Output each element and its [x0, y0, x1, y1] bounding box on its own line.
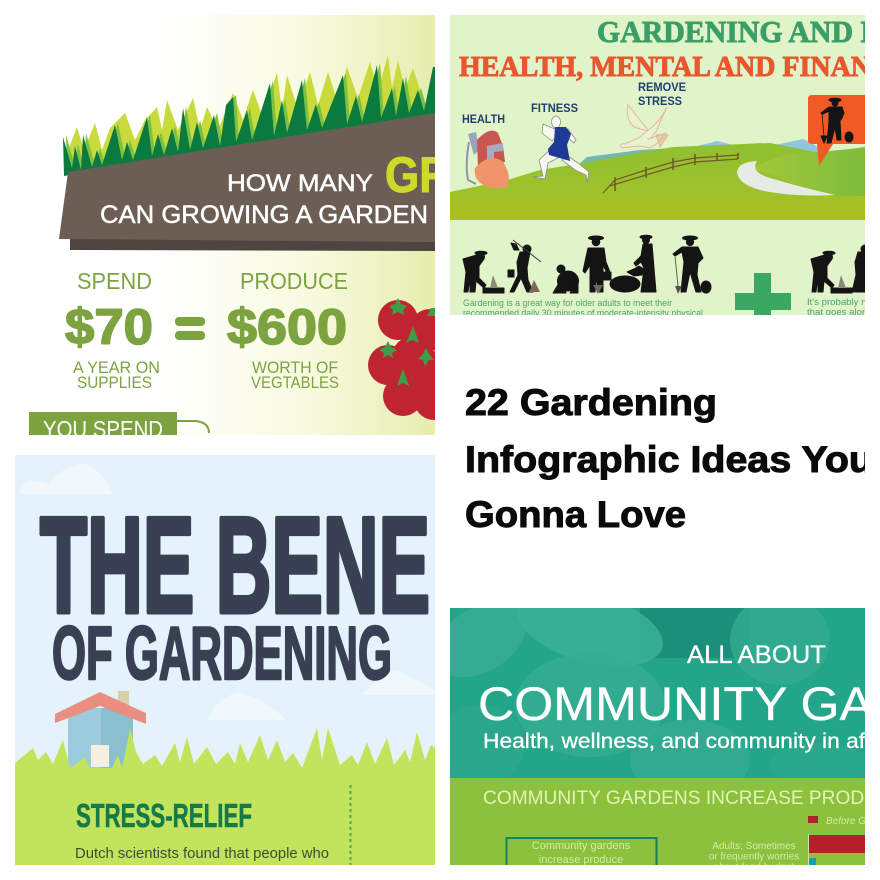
icon: heart [467, 131, 509, 188]
bar chart: Adults: Sometimes [712, 841, 796, 852]
equals sign [175, 317, 205, 340]
page title: 22 Gardening [465, 382, 717, 423]
silhouette: bending gardener repeat [811, 251, 852, 293]
section heading: COMMUNITY GARDENS INCREASE PRODU [483, 788, 878, 809]
bar chart: or frequently worries [709, 852, 799, 862]
silhouette: standing gardener with bucket [583, 236, 611, 294]
fence [603, 153, 738, 193]
label: remove stress: STRESS [638, 96, 682, 108]
label: fitness: FITNESS [531, 103, 578, 115]
produce column: VEGTABLES [251, 373, 339, 392]
main title: OF GARDENING [52, 611, 392, 695]
page title [465, 382, 873, 535]
dotted divider [350, 785, 352, 865]
icon: runner [533, 116, 589, 183]
bar chart: about food budget [714, 862, 795, 873]
icon: house [55, 691, 146, 770]
label: remove stress: REMOVE [638, 82, 686, 94]
silhouette: crouching gardener [553, 265, 578, 293]
produce callout box: Community gardens [532, 840, 631, 852]
heading: GARDENING AND [597, 14, 853, 49]
banner heading [101, 156, 435, 224]
page title: Gonna Love [465, 494, 686, 535]
grass field [15, 728, 435, 865]
heading: I [860, 14, 872, 49]
section text: Dutch scientists found that people who [75, 846, 329, 862]
teal header background [450, 608, 865, 778]
icon: dove [621, 105, 668, 148]
spend column: SUPPLIES [77, 373, 152, 392]
text: right body copy: It's probably not [807, 297, 875, 308]
panel background gradient [194, 15, 435, 435]
speech bubble with gardener [808, 95, 865, 166]
spend column: SPEND [77, 268, 152, 294]
clouds [20, 464, 435, 720]
produce column: PRODUCE [240, 268, 348, 294]
header text: Health, wellness, and community in aff [483, 730, 871, 753]
banner heading: GR [385, 147, 451, 203]
silhouette: gardener with spade [673, 236, 711, 294]
produce callout box [506, 838, 656, 878]
icon: green plus [735, 273, 791, 315]
text: gardening body copy: Gardening is a great way for older adults to meet their [463, 298, 673, 309]
panel: gardening health benefits infographic [450, 14, 875, 319]
banner [59, 113, 435, 242]
mountains [580, 139, 818, 164]
landscape [450, 139, 865, 220]
heading: HEALTH, MENTAL AND FINAN [459, 52, 871, 83]
page title: Infographic Ideas You [465, 439, 873, 480]
panel: garden savings infographic [15, 15, 454, 442]
grass on banner [63, 55, 435, 176]
text: gardening body copy [463, 300, 702, 315]
chart legend: Before G [826, 816, 866, 827]
produce column: $600 [227, 299, 347, 355]
spend column: $70 [65, 299, 153, 355]
you spend tab: YOU SPEND [43, 416, 163, 442]
silhouette: gardener with shovel repeat [852, 244, 865, 292]
panel: benefits of gardening infographic [15, 455, 435, 865]
produce column: WORTH OF [252, 358, 338, 377]
bar chart [709, 834, 865, 873]
produce callout box: increase produce [539, 854, 623, 866]
road [737, 161, 835, 195]
section heading: STRESS-RELIEF [76, 797, 252, 834]
spend column: A YEAR ON [73, 358, 160, 377]
header text: COMMUNITY GA [478, 677, 874, 730]
sky background [15, 455, 435, 768]
panel: community gardens infographic [421, 576, 878, 878]
panel background [450, 15, 865, 315]
text: gardening body copy: recommended daily 30 minutes of moderate-intensity physical [463, 308, 703, 319]
gardener silhouettes row [463, 235, 869, 294]
hills [450, 143, 865, 220]
spend column [65, 268, 160, 392]
heading [459, 22, 865, 82]
main title [40, 489, 430, 695]
label: health: HEALTH [462, 114, 505, 126]
header text [478, 641, 874, 753]
you spend tab [29, 412, 210, 435]
text: right body copy: that goes along [807, 307, 873, 318]
banner heading: HOW MANY [227, 170, 373, 197]
green lower background [450, 778, 865, 865]
banner heading: CAN GROWING A GARDEN [100, 201, 428, 229]
main title: THE BENE [40, 489, 430, 641]
leaf pattern [421, 576, 870, 800]
banner shadow [70, 239, 435, 251]
produce column [227, 268, 348, 392]
label: remove stress [638, 82, 686, 105]
silhouette: gardener watering plants [610, 235, 656, 292]
silhouette: bending gardener [463, 251, 504, 293]
text: right body copy [807, 298, 865, 315]
header text: ALL ABOUT [687, 641, 826, 669]
silhouette: gardener with shovel [508, 240, 541, 292]
icon: tomatoes [368, 298, 435, 420]
chart legend [808, 816, 866, 827]
